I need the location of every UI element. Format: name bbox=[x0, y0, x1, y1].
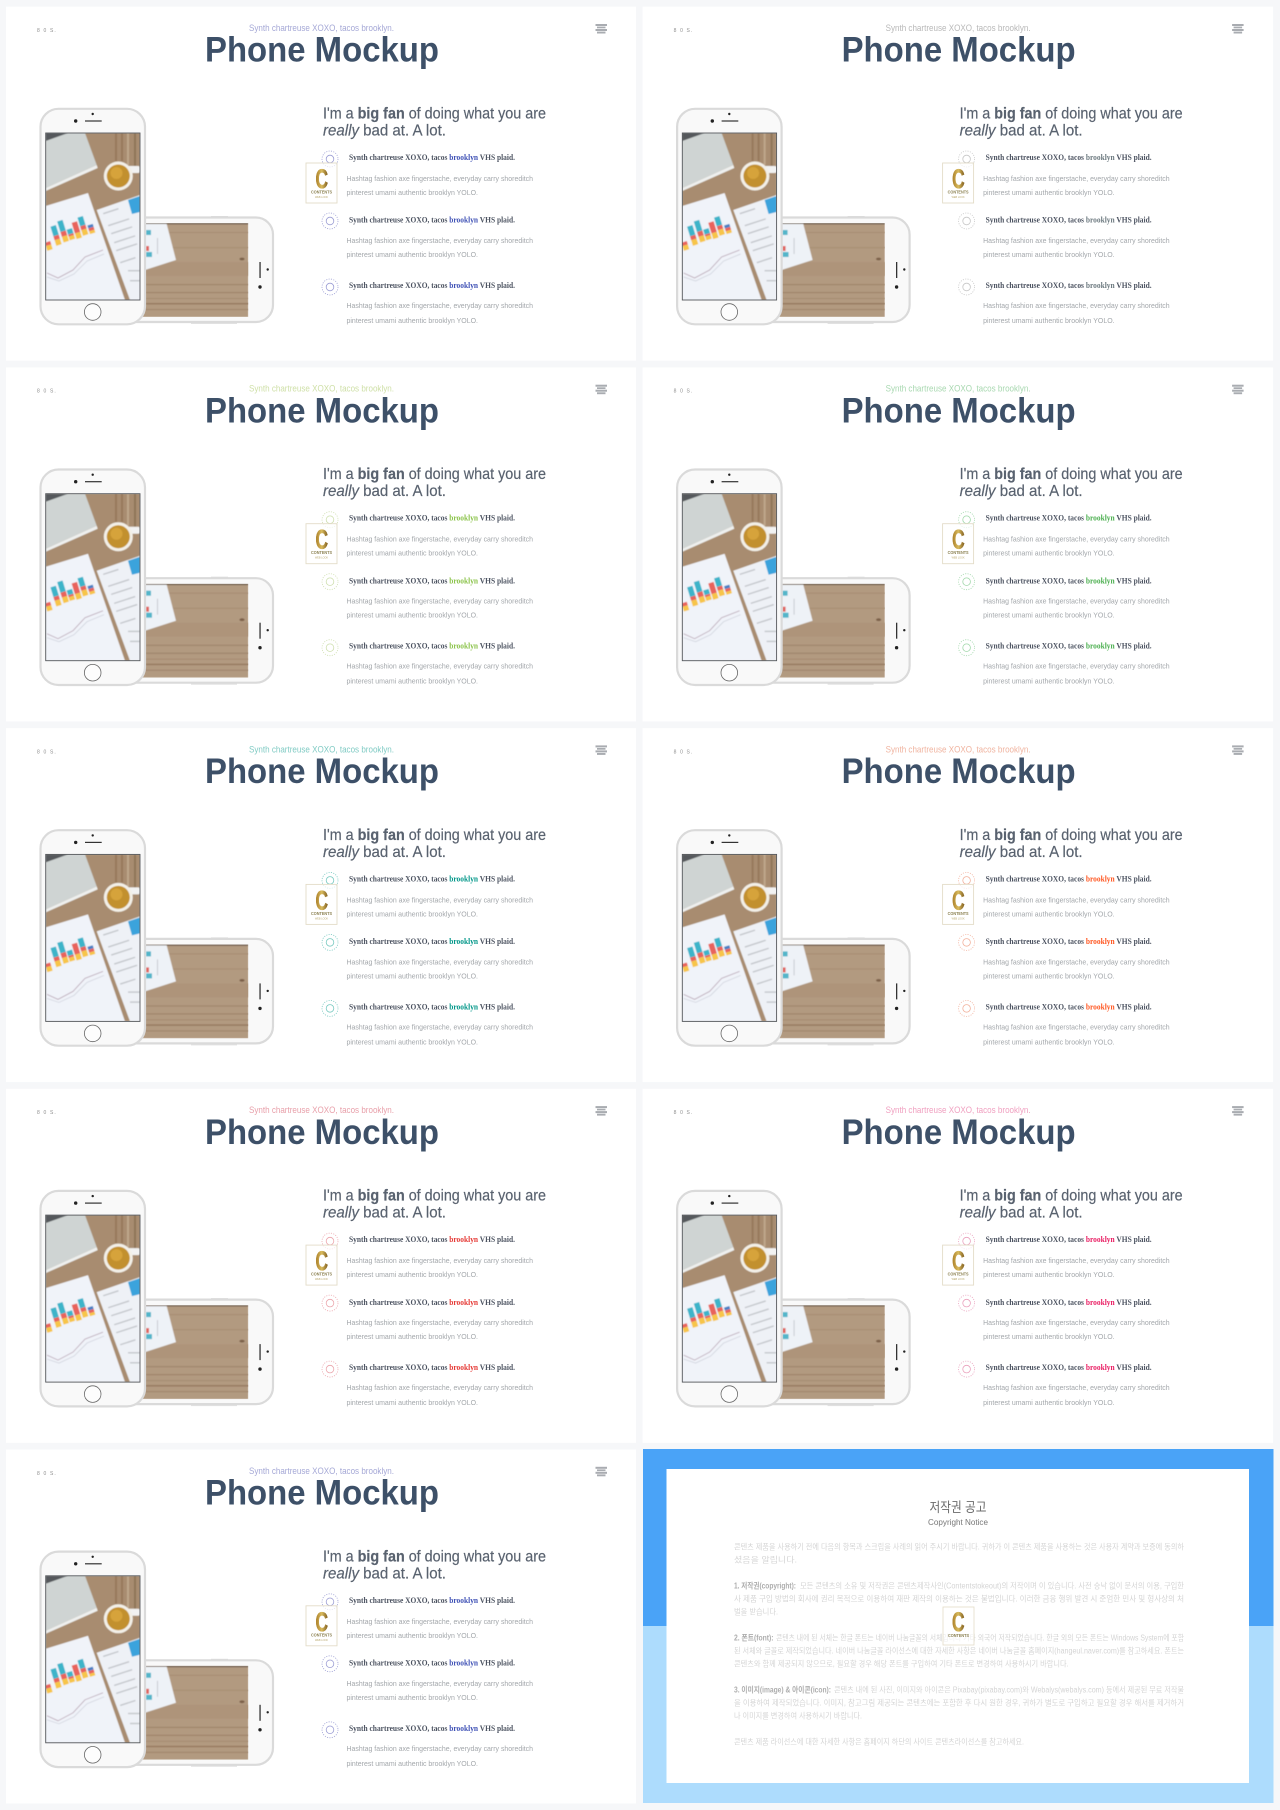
list item 2: pinterest umami authentic brooklyn YOLO. bbox=[346, 1332, 478, 1341]
list item 1: pinterest umami authentic brooklyn YOLO. bbox=[983, 909, 1115, 918]
heading bbox=[323, 106, 546, 140]
list item 1: Hashtag fashion axe fingerstache, everyday carry shoreditch bbox=[346, 1256, 533, 1265]
list item 2: Hashtag fashion axe fingerstache, everyday carry shoreditch bbox=[346, 236, 533, 245]
intro paragraph: 콘텐츠 제품을 사용하기 전에 다음의 항목과 스크립을 사례의 읽어 주시기 바랍니다. 귀하가 이 콘텐츠 제품을 사용하는 것은 사용자 계약과 보증에 동의하 bbox=[734, 1542, 1185, 1552]
phone mockup bbox=[677, 830, 910, 1046]
list item 3: Hashtag fashion axe fingerstache, everyday carry shoreditch bbox=[346, 301, 533, 310]
list item 3: Hashtag fashion axe fingerstache, everyday carry shoreditch bbox=[346, 1022, 533, 1031]
list item 2: pinterest umami authentic brooklyn YOLO. bbox=[983, 1332, 1115, 1341]
icon: menu stack bbox=[1232, 385, 1244, 394]
title: Phone Mockup bbox=[842, 1113, 1076, 1152]
brand mark: 8 0 S. bbox=[37, 1471, 57, 1477]
list item 1: Synth chartreuse XOXO, tacos brooklyn VHS plaid. bbox=[349, 1595, 515, 1605]
list item 1 bbox=[959, 872, 1170, 918]
list item 1: Synth chartreuse XOXO, tacos brooklyn VHS plaid. bbox=[986, 873, 1152, 883]
icon: menu stack bbox=[596, 1106, 607, 1116]
panel: copyright notice bbox=[643, 1449, 1274, 1803]
logo badge: WEB LOOK bbox=[952, 916, 965, 920]
subtitle: Synth chartreuse XOXO, tacos brooklyn. bbox=[249, 744, 394, 755]
list item 2: Synth chartreuse XOXO, tacos brooklyn VHS plaid. bbox=[986, 1297, 1152, 1307]
phone mockup bbox=[40, 470, 273, 685]
list item 1: Synth chartreuse XOXO, tacos brooklyn VHS plaid. bbox=[349, 873, 515, 883]
logo badge: CONTENTS bbox=[948, 1272, 969, 1277]
list item 1: Synth chartreuse XOXO, tacos brooklyn VHS plaid. bbox=[986, 152, 1152, 162]
list item 3: pinterest umami authentic brooklyn YOLO. bbox=[983, 677, 1115, 686]
list item 2 bbox=[322, 934, 533, 980]
list item 1: Hashtag fashion axe fingerstache, everyday carry shoreditch bbox=[346, 1617, 533, 1626]
phone mockup bbox=[40, 1191, 273, 1406]
logo badge: C bbox=[316, 164, 328, 194]
icon: menu stack bbox=[1232, 24, 1244, 34]
logo badge: C bbox=[952, 885, 965, 915]
logo badge: C bbox=[316, 1607, 328, 1637]
logo badge: CONTENTS bbox=[311, 1632, 332, 1637]
list item 3 bbox=[959, 279, 1170, 325]
list item 1: pinterest umami authentic brooklyn YOLO. bbox=[983, 1270, 1115, 1279]
list item 1: Synth chartreuse XOXO, tacos brooklyn VHS plaid. bbox=[349, 1234, 515, 1244]
logo badge: C bbox=[316, 525, 328, 555]
list item 1 bbox=[959, 512, 1170, 558]
logo badge: CONTENTS bbox=[948, 190, 969, 194]
list item 2 bbox=[322, 1295, 533, 1341]
logo badge: WEB LOOK bbox=[952, 556, 965, 560]
brand mark: 8 0 S. bbox=[37, 749, 57, 755]
heading: really bad at. A lot. bbox=[323, 1565, 446, 1582]
logo badge: WEB LOOK bbox=[315, 556, 328, 560]
list item 3: Synth chartreuse XOXO, tacos brooklyn VHS plaid. bbox=[349, 641, 515, 651]
list item 2 bbox=[322, 1656, 533, 1702]
logo badge: C bbox=[316, 1246, 328, 1276]
heading bbox=[323, 827, 546, 861]
list item 2 bbox=[959, 934, 1170, 980]
heading: I'm a big fan of doing what you are bbox=[323, 106, 546, 122]
list item 1: Hashtag fashion axe fingerstache, everyday carry shoreditch bbox=[346, 535, 533, 544]
list item 3: pinterest umami authentic brooklyn YOLO. bbox=[983, 1037, 1115, 1046]
list item 3: Synth chartreuse XOXO, tacos brooklyn VHS plaid. bbox=[349, 280, 515, 290]
list item 1 bbox=[322, 151, 533, 197]
list item 2: Hashtag fashion axe fingerstache, everyday carry shoreditch bbox=[983, 236, 1170, 245]
list item 3: Hashtag fashion axe fingerstache, everyday carry shoreditch bbox=[346, 662, 533, 671]
logo badge bbox=[943, 1245, 974, 1285]
heading bbox=[960, 466, 1183, 500]
logo badge: WEB LOOK bbox=[315, 916, 328, 920]
heading: I'm a big fan of doing what you are bbox=[960, 106, 1183, 122]
list item 2: Synth chartreuse XOXO, tacos brooklyn VHS plaid. bbox=[349, 215, 515, 225]
title: Phone Mockup bbox=[205, 1474, 439, 1513]
list item 2: pinterest umami authentic brooklyn YOLO. bbox=[346, 611, 478, 620]
title: Phone Mockup bbox=[205, 391, 439, 430]
list item 2: Synth chartreuse XOXO, tacos brooklyn VHS plaid. bbox=[986, 575, 1152, 585]
subtitle: Synth chartreuse XOXO, tacos brooklyn. bbox=[249, 384, 394, 395]
logo badge: CONTENTS bbox=[311, 1272, 332, 1277]
list item 3 bbox=[322, 1722, 533, 1768]
panel: phone mockup, green bbox=[643, 367, 1273, 721]
logo badge: WEB LOOK bbox=[315, 1277, 328, 1281]
paragraph 2: font bbox=[734, 1633, 1185, 1668]
list item 1: pinterest umami authentic brooklyn YOLO. bbox=[983, 188, 1115, 197]
list item 3 bbox=[959, 1361, 1170, 1407]
list item 2: Hashtag fashion axe fingerstache, everyday carry shoreditch bbox=[346, 1679, 533, 1688]
paragraph 3: image and icon: 나 이미지를 변경하여 사용하시기 바랍니다. bbox=[734, 1710, 862, 1720]
intro paragraph bbox=[734, 1542, 1185, 1564]
list item 1: Synth chartreuse XOXO, tacos brooklyn VHS plaid. bbox=[986, 1234, 1152, 1244]
heading: really bad at. A lot. bbox=[323, 122, 446, 140]
list item 3: Synth chartreuse XOXO, tacos brooklyn VHS plaid. bbox=[986, 280, 1152, 290]
paragraph 3: image and icon bbox=[734, 1684, 1184, 1720]
list item 3: Hashtag fashion axe fingerstache, everyday carry shoreditch bbox=[983, 1022, 1170, 1031]
heading: I'm a big fan of doing what you are bbox=[323, 1548, 546, 1565]
subtitle: Synth chartreuse XOXO, tacos brooklyn. bbox=[886, 384, 1031, 395]
list item 3: Hashtag fashion axe fingerstache, everyday carry shoreditch bbox=[983, 301, 1170, 310]
icon: menu stack bbox=[596, 24, 607, 34]
paragraph 1: copyright: 사 제품 구입 방법의 회사에 권리 목적으로 이용하여 재판 제작의 이용하는 것은 불법입니다. 이러한 금융 행위 발견 시 준엄한 민사 및 형사상의 처 bbox=[734, 1594, 1184, 1604]
paragraph 2: font: 콘텐츠 내에 된 서체는 한글 폰트는 네이버 나눔글꼴의 서체입니다 기타 외국어 저작되었습니다. 한글 외의 모든 폰트는 Windows System에 포함 bbox=[776, 1633, 1185, 1643]
list item 1: pinterest umami authentic brooklyn YOLO. bbox=[346, 1631, 478, 1640]
phone mockup bbox=[40, 830, 273, 1046]
logo badge bbox=[306, 163, 337, 203]
heading: really bad at. A lot. bbox=[960, 1205, 1083, 1222]
list item 2: pinterest umami authentic brooklyn YOLO. bbox=[346, 1693, 478, 1702]
icon: menu stack bbox=[596, 385, 607, 394]
panel: phone mockup, pink bbox=[643, 1089, 1273, 1443]
logo badge: WEB LOOK bbox=[315, 195, 328, 199]
list item 2 bbox=[959, 574, 1170, 620]
icon: menu stack bbox=[596, 745, 607, 755]
subtitle: Synth chartreuse XOXO, tacos brooklyn. bbox=[886, 744, 1031, 755]
list item 3 bbox=[322, 279, 533, 325]
list item 3: pinterest umami authentic brooklyn YOLO. bbox=[983, 316, 1115, 325]
list item 1: Hashtag fashion axe fingerstache, everyday carry shoreditch bbox=[983, 535, 1170, 544]
list item 2: Synth chartreuse XOXO, tacos brooklyn VHS plaid. bbox=[986, 215, 1152, 225]
list item 3: Synth chartreuse XOXO, tacos brooklyn VHS plaid. bbox=[349, 1362, 515, 1372]
list item 3: pinterest umami authentic brooklyn YOLO. bbox=[346, 677, 478, 686]
paragraph 2: font: 2. 폰트(font): bbox=[734, 1634, 774, 1643]
list item 2: Hashtag fashion axe fingerstache, everyday carry shoreditch bbox=[983, 957, 1170, 966]
list item 1: pinterest umami authentic brooklyn YOLO. bbox=[346, 1270, 478, 1279]
list item 3 bbox=[959, 1000, 1170, 1046]
brand mark: 8 0 S. bbox=[674, 28, 694, 34]
logo badge: C bbox=[952, 525, 965, 555]
heading: I'm a big fan of doing what you are bbox=[323, 827, 546, 844]
paragraph 3: image and icon: 을 이용하여 제작되었습니다. 이미지, 참고그림 제공되는 콘텐츠에는 포함한 후 다시 원한 경우, 귀하가 별도로 구입하고 필요할 경우 해서를 제거하거 bbox=[734, 1698, 1184, 1708]
heading bbox=[323, 466, 546, 500]
heading: really bad at. A lot. bbox=[323, 1205, 446, 1222]
heading: I'm a big fan of doing what you are bbox=[960, 466, 1183, 483]
heading bbox=[960, 106, 1183, 140]
heading: really bad at. A lot. bbox=[960, 122, 1083, 140]
logo badge bbox=[306, 1245, 337, 1285]
brand mark: 8 0 S. bbox=[37, 1110, 57, 1116]
list item 1: Synth chartreuse XOXO, tacos brooklyn VHS plaid. bbox=[349, 513, 515, 523]
list item 3: Synth chartreuse XOXO, tacos brooklyn VHS plaid. bbox=[986, 1362, 1152, 1372]
list item 1 bbox=[322, 1233, 533, 1279]
panel: phone mockup, teal bbox=[6, 728, 636, 1082]
panel: phone mockup, orange bbox=[643, 728, 1273, 1082]
list item 2: Synth chartreuse XOXO, tacos brooklyn VHS plaid. bbox=[349, 1297, 515, 1307]
list item 2: Hashtag fashion axe fingerstache, everyday carry shoreditch bbox=[983, 597, 1170, 606]
logo badge: CONTENTS bbox=[948, 550, 969, 555]
list item 1: pinterest umami authentic brooklyn YOLO. bbox=[346, 188, 478, 197]
phone mockup bbox=[677, 1191, 910, 1406]
list item 3: Hashtag fashion axe fingerstache, everyday carry shoreditch bbox=[983, 1383, 1170, 1392]
heading bbox=[960, 1188, 1183, 1222]
title: Phone Mockup bbox=[842, 31, 1076, 70]
panel: phone mockup, lime bbox=[6, 367, 636, 721]
logo badge: WEB LOOK bbox=[952, 195, 965, 199]
panel: phone mockup, indigo repeat bbox=[6, 1450, 636, 1804]
list item 2: Synth chartreuse XOXO, tacos brooklyn VHS plaid. bbox=[986, 936, 1152, 946]
subtitle: Synth chartreuse XOXO, tacos brooklyn. bbox=[249, 1466, 394, 1477]
logo badge bbox=[943, 884, 974, 924]
list item 3: pinterest umami authentic brooklyn YOLO. bbox=[346, 1759, 478, 1768]
list item 1: Hashtag fashion axe fingerstache, everyday carry shoreditch bbox=[983, 895, 1170, 904]
title: Phone Mockup bbox=[205, 31, 439, 70]
logo badge bbox=[306, 884, 337, 924]
panel: phone mockup, red bbox=[6, 1089, 636, 1443]
panel: phone mockup, grey bbox=[643, 7, 1273, 361]
phone mockup bbox=[677, 109, 910, 324]
logo badge: CONTENTS bbox=[311, 190, 332, 194]
heading: really bad at. A lot. bbox=[960, 844, 1083, 861]
paragraph 3: image and icon: 3. 이미지(image) & 아이콘(icon): bbox=[734, 1684, 831, 1694]
list item 3: Synth chartreuse XOXO, tacos brooklyn VHS plaid. bbox=[986, 641, 1152, 651]
list item 2: pinterest umami authentic brooklyn YOLO. bbox=[346, 250, 478, 259]
logo badge: CONTENTS bbox=[311, 911, 332, 916]
list item 2 bbox=[959, 213, 1170, 259]
title: Phone Mockup bbox=[205, 1113, 439, 1152]
subtitle: Synth chartreuse XOXO, tacos brooklyn. bbox=[249, 1105, 394, 1116]
list item 1 bbox=[959, 1233, 1170, 1279]
logo badge: C bbox=[952, 1607, 964, 1637]
logo badge bbox=[943, 1607, 974, 1645]
heading: I'm a big fan of doing what you are bbox=[960, 827, 1183, 844]
list item 3: Hashtag fashion axe fingerstache, everyday carry shoreditch bbox=[983, 662, 1170, 671]
list item 1: Hashtag fashion axe fingerstache, everyday carry shoreditch bbox=[346, 895, 533, 904]
heading: really bad at. A lot. bbox=[323, 844, 446, 861]
list item 2 bbox=[322, 213, 533, 259]
list item 3 bbox=[322, 640, 533, 686]
logo badge: C bbox=[952, 1246, 965, 1276]
brand mark: 8 0 S. bbox=[674, 749, 694, 755]
list item 1: Hashtag fashion axe fingerstache, everyday carry shoreditch bbox=[983, 174, 1170, 183]
list item 2: Hashtag fashion axe fingerstache, everyday carry shoreditch bbox=[346, 597, 533, 606]
title: Phone Mockup bbox=[842, 752, 1076, 791]
heading bbox=[323, 1188, 546, 1222]
heading: I'm a big fan of doing what you are bbox=[323, 1188, 546, 1205]
heading: I'm a big fan of doing what you are bbox=[960, 1188, 1183, 1205]
list item 1: pinterest umami authentic brooklyn YOLO. bbox=[983, 549, 1115, 558]
logo badge bbox=[943, 163, 974, 203]
panel: phone mockup, indigo bbox=[6, 7, 636, 361]
list item 1 bbox=[322, 1594, 533, 1640]
heading: really bad at. A lot. bbox=[323, 483, 446, 500]
list item 1 bbox=[322, 872, 533, 918]
paragraph 1: copyright: 1. 저작권(copyright): bbox=[734, 1581, 796, 1591]
brand mark: 8 0 S. bbox=[37, 389, 57, 395]
subtitle: Synth chartreuse XOXO, tacos brooklyn. bbox=[886, 1105, 1031, 1116]
list item 2: pinterest umami authentic brooklyn YOLO. bbox=[983, 971, 1115, 980]
title: Phone Mockup bbox=[842, 391, 1076, 430]
list item 3: Synth chartreuse XOXO, tacos brooklyn VHS plaid. bbox=[349, 1001, 515, 1011]
logo badge: CONTENTS bbox=[311, 550, 332, 555]
list item 3: pinterest umami authentic brooklyn YOLO. bbox=[346, 1398, 478, 1407]
heading: really bad at. A lot. bbox=[960, 483, 1083, 500]
logo badge bbox=[306, 1606, 337, 1646]
list item 2: Hashtag fashion axe fingerstache, everyday carry shoreditch bbox=[983, 1318, 1170, 1327]
paragraph 2: font: 된 서체와 글꼴로 제작되었습니다. 네이버 나눔글꼴 라이선스에 대한 자세한 사항은 네이버 나눔글꼴 홈페이지(hangeul.naver.com)를 참고하세요. 폰트는 bbox=[734, 1646, 1184, 1656]
list item 2: Hashtag fashion axe fingerstache, everyday carry shoreditch bbox=[346, 957, 533, 966]
logo badge: CONTENTS bbox=[948, 911, 969, 916]
list item 3: pinterest umami authentic brooklyn YOLO. bbox=[346, 316, 478, 325]
phone mockup bbox=[40, 109, 273, 324]
list item 2: Synth chartreuse XOXO, tacos brooklyn VHS plaid. bbox=[349, 936, 515, 946]
list item 2 bbox=[959, 1295, 1170, 1341]
list item 2: Synth chartreuse XOXO, tacos brooklyn VHS plaid. bbox=[349, 1658, 515, 1668]
list item 1: Hashtag fashion axe fingerstache, everyday carry shoreditch bbox=[346, 174, 533, 183]
list item 3: pinterest umami authentic brooklyn YOLO. bbox=[983, 1398, 1115, 1407]
list item 3 bbox=[959, 640, 1170, 686]
logo badge: C bbox=[316, 885, 328, 915]
logo badge: CONTENTS bbox=[948, 1633, 969, 1638]
list item 2: pinterest umami authentic brooklyn YOLO. bbox=[346, 971, 478, 980]
brand mark: 8 0 S. bbox=[37, 28, 57, 34]
logo badge bbox=[943, 524, 974, 564]
logo badge: WEB LOOK bbox=[952, 1277, 965, 1281]
list item 2: Synth chartreuse XOXO, tacos brooklyn VHS plaid. bbox=[349, 575, 515, 585]
list item 1: pinterest umami authentic brooklyn YOLO. bbox=[346, 549, 478, 558]
paragraph 2: font: 콘텐츠와 함께 제공되지 않으므로, 필요할 경우 해당 폰트를 구입하여 기타 폰트로 변경하여 사용하시기 바랍니다. bbox=[734, 1658, 1069, 1668]
icon: menu stack bbox=[1232, 745, 1244, 755]
heading: I'm a big fan of doing what you are bbox=[323, 466, 546, 483]
list item 2: pinterest umami authentic brooklyn YOLO. bbox=[983, 250, 1115, 259]
phone mockup bbox=[40, 1552, 273, 1767]
heading bbox=[323, 1548, 546, 1582]
list item 1 bbox=[959, 151, 1170, 197]
subtitle: Synth chartreuse XOXO, tacos brooklyn. bbox=[886, 23, 1031, 34]
list item 2: Hashtag fashion axe fingerstache, everyday carry shoreditch bbox=[346, 1318, 533, 1327]
list item 1: Synth chartreuse XOXO, tacos brooklyn VHS plaid. bbox=[349, 152, 515, 162]
logo badge: C bbox=[952, 164, 965, 194]
closing paragraph: 콘텐츠 제품 라이선스에 대한 자세한 사항은 홈페이지 하단의 사이트 콘텐츠라이선스를 참고하세요. bbox=[734, 1736, 1024, 1746]
list item 3: Synth chartreuse XOXO, tacos brooklyn VHS plaid. bbox=[349, 1723, 515, 1733]
paragraph 1: copyright bbox=[734, 1581, 1185, 1617]
list item 1: pinterest umami authentic brooklyn YOLO. bbox=[346, 909, 478, 918]
intro paragraph: 셨음을 알립니다. bbox=[734, 1554, 797, 1564]
notice subtitle: Copyright Notice bbox=[928, 1518, 989, 1527]
list item 2 bbox=[322, 574, 533, 620]
brand mark: 8 0 S. bbox=[674, 1110, 694, 1116]
list item 1 bbox=[322, 512, 533, 558]
list item 3 bbox=[322, 1361, 533, 1407]
list item 3: pinterest umami authentic brooklyn YOLO. bbox=[346, 1037, 478, 1046]
notice title: 저작권 공고 bbox=[930, 1500, 986, 1515]
logo badge bbox=[306, 524, 337, 564]
list item 3: Hashtag fashion axe fingerstache, everyday carry shoreditch bbox=[346, 1744, 533, 1753]
heading bbox=[960, 827, 1183, 861]
list item 2: pinterest umami authentic brooklyn YOLO. bbox=[983, 611, 1115, 620]
list item 3: Synth chartreuse XOXO, tacos brooklyn VHS plaid. bbox=[986, 1001, 1152, 1011]
logo badge: WEB LOOK bbox=[315, 1638, 328, 1642]
list item 1: Hashtag fashion axe fingerstache, everyday carry shoreditch bbox=[983, 1256, 1170, 1265]
paragraph 1: copyright: 모든 콘텐츠의 소유 및 저작권은 콘텐츠제작사인(Contentstokeout)의 저작이며 이 있습니다. 사전 승낙 없이 문서의 이용, 구입한 bbox=[800, 1581, 1185, 1591]
subtitle: Synth chartreuse XOXO, tacos brooklyn. bbox=[249, 23, 394, 34]
phone mockup bbox=[677, 470, 910, 685]
icon: menu stack bbox=[1232, 1106, 1244, 1116]
list item 3 bbox=[322, 1000, 533, 1046]
icon: menu stack bbox=[596, 1467, 607, 1476]
list item 1: Synth chartreuse XOXO, tacos brooklyn VHS plaid. bbox=[986, 513, 1152, 523]
title: Phone Mockup bbox=[205, 752, 439, 791]
list item 3: Hashtag fashion axe fingerstache, everyday carry shoreditch bbox=[346, 1383, 533, 1392]
brand mark: 8 0 S. bbox=[674, 389, 694, 395]
paragraph 1: copyright: 벌을 받습니다. bbox=[734, 1607, 778, 1617]
paragraph 3: image and icon: 콘텐츠 내에 된 사진, 이미지와 아이콘은 Pixabay(pixabay.com)와 Webalys(webalys.com) 등에서 제공된 무료 저작물 bbox=[834, 1684, 1184, 1694]
